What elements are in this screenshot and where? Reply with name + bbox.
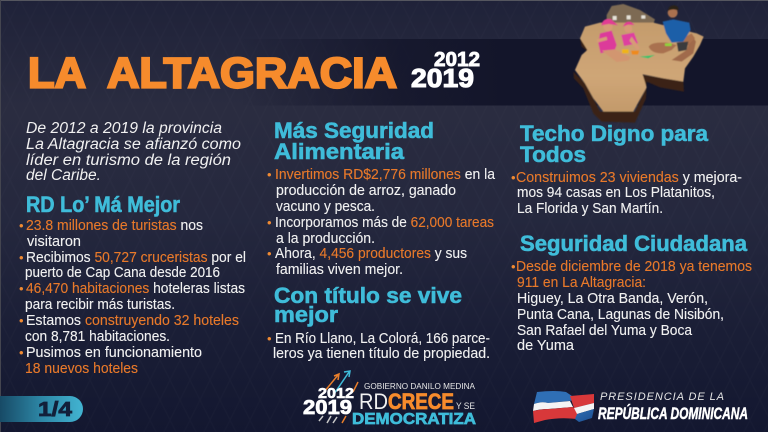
bullet list: alimentaria: familias viven mejor. — [276, 261, 403, 278]
title band — [240, 39, 768, 106]
heading: Techo Digno para Todos: Techo Digno para — [520, 121, 709, 146]
bullet list: turismo: 46,470 habitaciones hoteleras listas — [26, 280, 245, 297]
title years: 2019 — [411, 63, 474, 93]
bullet list: turismo: • — [19, 313, 24, 328]
bullet list: turismo: Recibimos 50,727 cruceristas por el — [26, 249, 246, 266]
bullet text: 911: 911 en La Altagracia: — [517, 274, 646, 291]
icon: rising arrows — [319, 371, 358, 423]
logo: RD Crece y se Democratiza: DEMOCRATIZA — [352, 411, 476, 428]
bullet list: turismo: para recibir más turistas. — [25, 296, 175, 313]
bullet list: turismo: • — [19, 218, 24, 233]
panel: Seguridad Ciudadana — [511, 231, 752, 354]
rock hill — [607, 4, 655, 24]
intro text: líder en turismo de la región — [26, 152, 231, 169]
bullet list: turismo: visitaron — [27, 233, 81, 250]
bullet list: turismo: 23.8 millones de turistas nos — [26, 217, 203, 234]
heading: Techo Digno para Todos — [520, 121, 709, 167]
bullet list: alimentaria — [267, 166, 496, 278]
bullet list: turismo: 18 nuevos hoteles — [25, 360, 138, 377]
bullet list: alimentaria: a la producción. — [276, 230, 375, 247]
bullet list: turismo: Estamos construyendo 32 hoteles — [26, 312, 239, 329]
bullet text: 911: Punta Cana, Lagunas de Nisibón, — [517, 306, 724, 323]
bullet text: viviendas: Construimos 23 viviendas y mejora- — [516, 169, 742, 186]
bullet list: alimentaria: Invertimos RD$2,776 millones en la — [275, 166, 496, 183]
bullet text: títulos: leros ya tienen título de propiedad. — [273, 345, 490, 362]
beach toys — [622, 43, 672, 58]
heading: Más Seguridad Alimentaria — [274, 118, 434, 164]
intro text: del Caribe. — [26, 167, 101, 184]
logo: RD Crece y se Democratiza: RD — [359, 389, 388, 414]
heading: Con título se vive mejor: mejor — [274, 302, 338, 327]
intro text: La Altagracia se afianzó como — [26, 136, 241, 153]
logo: RD Crece y se Democratiza: 2012 — [318, 385, 354, 402]
bullet list: turismo: Pusimos en funcionamiento — [26, 344, 202, 361]
map soil edge — [573, 38, 684, 123]
logo: Presidencia de la República Dominicana: PRESIDENCIA DE LA — [600, 391, 724, 403]
bullet list: turismo: • — [19, 345, 24, 360]
logo: Presidencia de la República Dominicana — [533, 391, 748, 423]
bullet list: alimentaria: Incorporamos más de 62,000 tareas — [275, 214, 494, 231]
bullet list: alimentaria: • — [267, 215, 272, 230]
title years — [411, 49, 480, 93]
panel: Más Seguridad Alimentaria — [267, 118, 496, 278]
intro text: De 2012 a 2019 la provincia — [26, 120, 222, 137]
bullet text: títulos — [267, 330, 490, 362]
bullet text: 911 — [511, 258, 752, 354]
bullet list: turismo: • — [19, 250, 24, 265]
title: LA — [28, 50, 86, 98]
logo: RD Crece y se Democratiza: 2019 — [303, 397, 352, 419]
bullet list: turismo: con 8,781 habitaciones. — [25, 328, 170, 345]
map photo of La Altagracia — [573, 4, 704, 123]
heading: Más Seguridad Alimentaria: Más Seguridad — [274, 118, 434, 143]
child right — [621, 22, 640, 50]
logo: RD Crece y se Democratiza: CRECE — [388, 389, 454, 414]
heading: Con título se vive mejor — [274, 283, 462, 327]
heading: Seguridad Ciudadana: Seguridad Ciudadana — [520, 231, 748, 256]
page indicator pill: 1/4 — [38, 399, 73, 421]
bullet text: viviendas — [511, 169, 742, 217]
title: ALTAGRACIA — [107, 50, 397, 98]
bullet text: 911: • — [511, 259, 516, 274]
bullet text: viviendas: La Florida y San Martín. — [517, 200, 663, 217]
bullet text: 911: Higuey, La Otra Banda, Verón, — [517, 290, 708, 307]
title years: 2012 — [434, 49, 480, 71]
heading: Techo Digno para Todos: Todos — [520, 142, 586, 167]
bullet list: alimentaria: • — [267, 246, 272, 261]
bullet text: 911: Desde diciembre de 2018 ya tenemos — [516, 258, 752, 275]
bullet list: turismo — [19, 217, 246, 377]
bullet list: turismo: puerto de Cap Cana desde 2016 — [25, 264, 220, 281]
bullet text: viviendas: • — [511, 170, 516, 185]
logo: RD Crece y se Democratiza: Y SE — [456, 401, 475, 411]
child left — [597, 19, 631, 62]
bullet text: viviendas: mos 94 casas en Los Platanitos, — [517, 184, 715, 201]
page indicator pill — [0, 396, 83, 422]
logo: RD Crece y se Democratiza — [303, 371, 476, 428]
panel: Con título se vive mejor — [267, 283, 490, 362]
icon: waving flag — [533, 391, 594, 423]
panel: Techo Digno para Todos — [511, 121, 742, 217]
bullet list: alimentaria: producción de arroz, ganado — [276, 182, 456, 199]
heading: Con título se vive mejor: Con título se vive — [274, 283, 462, 308]
logo: RD Crece y se Democratiza: GOBIERNO DANILO MEDINA — [364, 381, 475, 391]
bullet list: turismo: • — [19, 281, 24, 296]
sand — [575, 23, 704, 112]
intro text — [26, 120, 241, 184]
bullet text: 911: de Yuma — [517, 337, 575, 354]
bullet list: alimentaria: Ahora, 4,456 productores y sus — [275, 245, 467, 262]
heading: RD Lo' Má Mejor: RD Lo’ Má Mejor — [26, 192, 180, 217]
bullet list: alimentaria: • — [267, 167, 272, 182]
bullet text: títulos: En Río Llano, La Colorá, 166 parce- — [275, 330, 490, 347]
man — [649, 5, 696, 62]
heading: Más Seguridad Alimentaria: Alimentaria — [274, 139, 405, 164]
bullet text: títulos: • — [267, 331, 272, 346]
panel: RD Lo' Má Mejor — [19, 192, 246, 377]
bullet text: 911: San Rafael del Yuma y Boca — [517, 322, 693, 339]
bullet list: alimentaria: vacuno y pesca. — [276, 198, 375, 215]
